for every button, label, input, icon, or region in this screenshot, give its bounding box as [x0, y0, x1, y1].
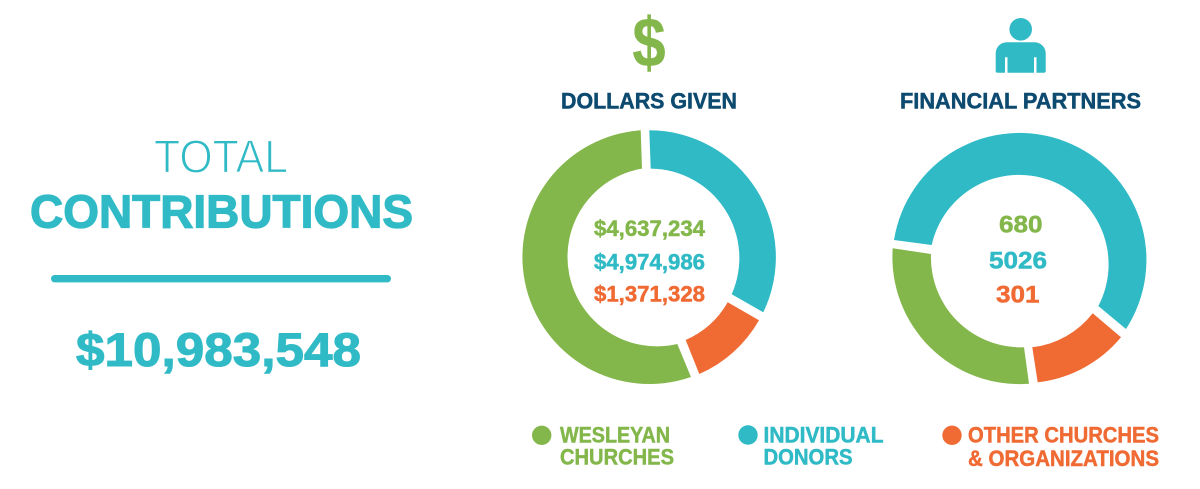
value: wesleyan churches: 680: [999, 211, 1042, 238]
legend item: other churches and organizations: OTHER CHURCHES: [968, 423, 1159, 448]
legend item: individual donors: [738, 423, 884, 469]
donut chart: financial partners: [892, 133, 1146, 384]
legend item: individual donors: INDIVIDUAL: [764, 423, 884, 448]
legend item: individual donors: DONORS: [764, 444, 852, 469]
value: individual donors: $4,974,986: [594, 250, 705, 274]
heading: dollars given: DOLLARS GIVEN: [561, 89, 737, 114]
icon: dollar sign: $: [632, 4, 666, 82]
segment: individual donors: [894, 133, 1146, 329]
heading: contributions: CONTRIBUTIONS: [30, 186, 413, 238]
panel: financial partners: [892, 18, 1146, 384]
segment: wesleyan churches: [892, 248, 1029, 384]
heading: financial partners: FINANCIAL PARTNERS: [900, 89, 1141, 114]
segment: wesleyan churches: [522, 130, 691, 384]
divider bar: [51, 275, 391, 282]
legend item: other churches and organizations: [942, 423, 1159, 471]
legend item: wesleyan churches: CHURCHES: [560, 444, 674, 469]
values: dollars given: [594, 216, 706, 307]
values: financial partners: [989, 211, 1047, 308]
legend item: wesleyan churches: WESLEYAN: [560, 423, 670, 448]
donut chart: dollars given: [522, 130, 776, 384]
segment: individual donors: [649, 130, 776, 312]
value: other churches: 301: [996, 281, 1040, 308]
panel: dollars given: [522, 4, 776, 384]
legend item: other churches and organizations: & ORGANIZATIONS: [968, 446, 1159, 471]
total amount: $10,983,548: [76, 323, 361, 376]
segment: other churches: [1032, 313, 1121, 382]
legend: [532, 423, 1159, 471]
icon: person: [996, 18, 1046, 73]
value: wesleyan churches: $4,637,234: [594, 216, 706, 241]
panel: total contributions: [30, 131, 413, 376]
value: individual donors: 5026: [989, 247, 1047, 274]
heading: total: TOTAL: [154, 131, 288, 183]
value: other churches: $1,371,328: [594, 282, 705, 307]
legend item: wesleyan churches: [532, 423, 674, 469]
segment: other churches: [686, 302, 759, 374]
